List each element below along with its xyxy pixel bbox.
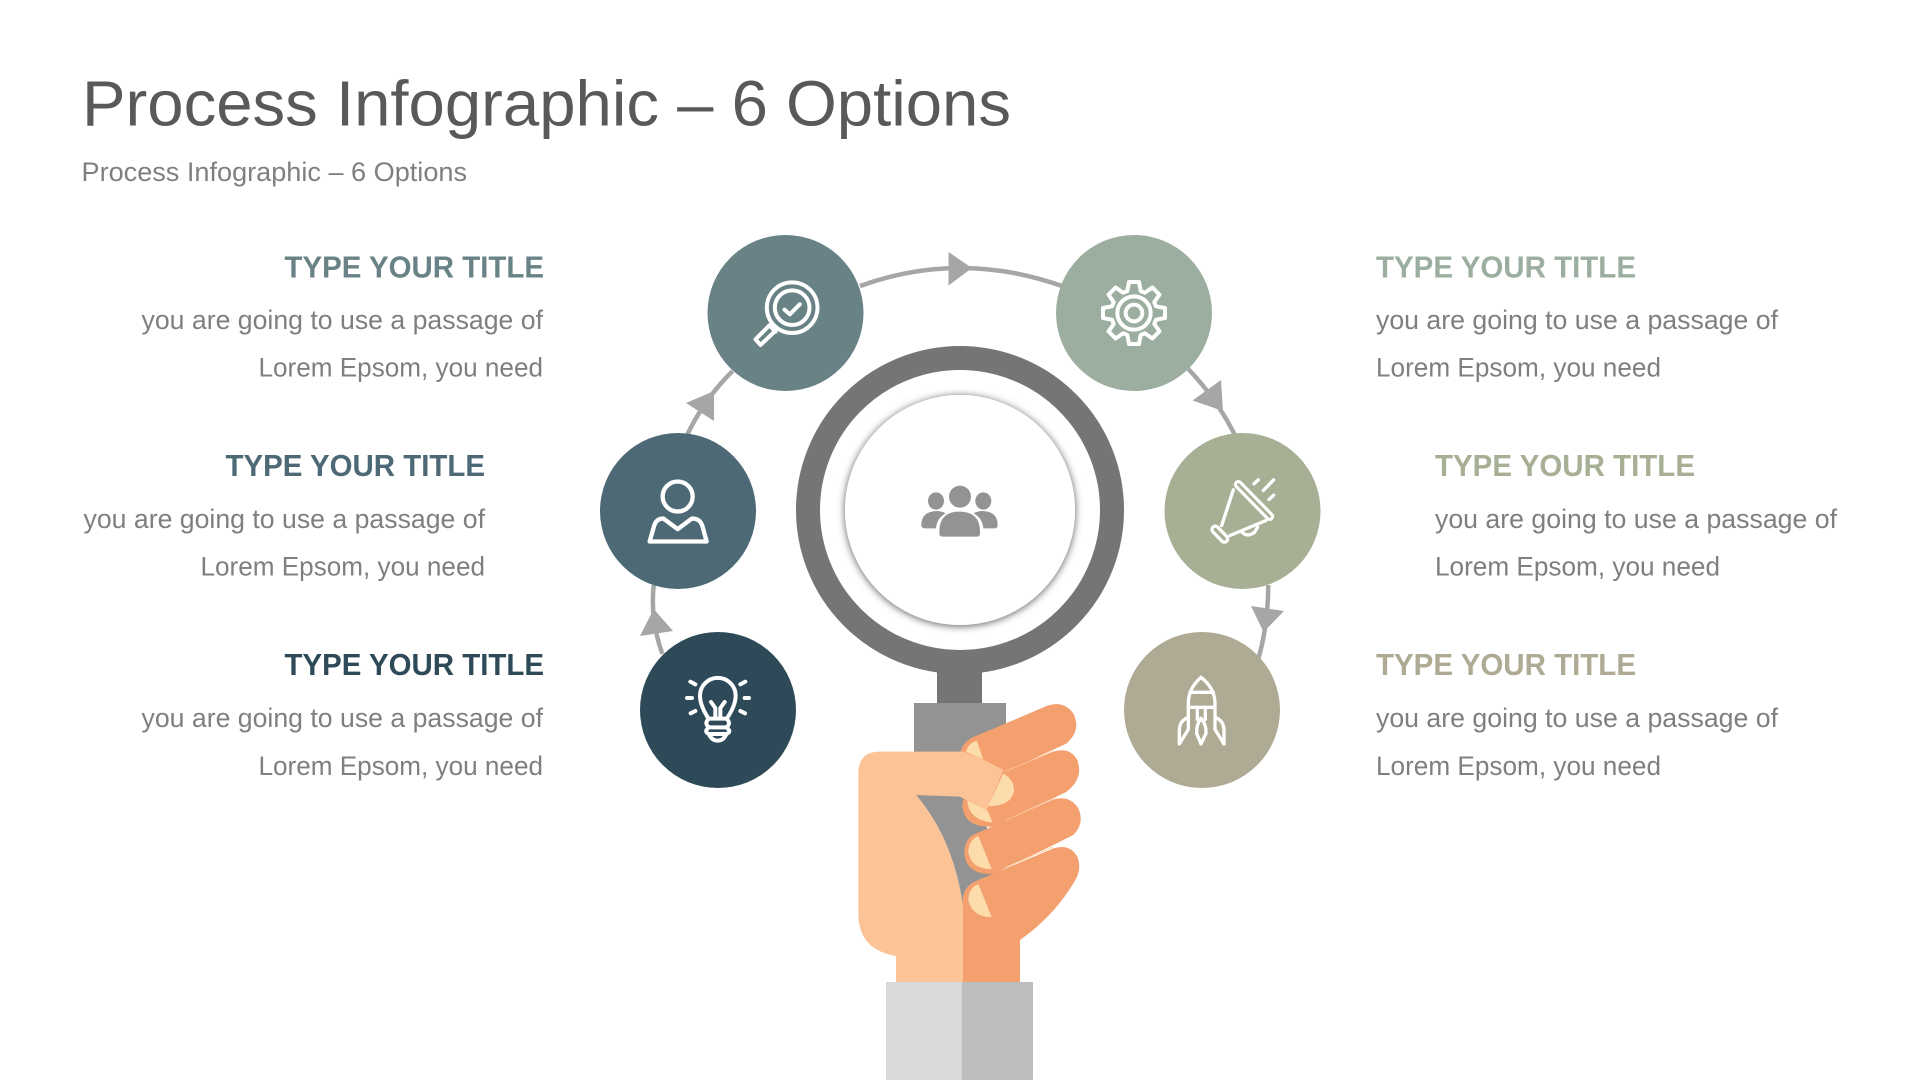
icon: magnifier with check	[755, 282, 817, 345]
text block: person step	[84, 448, 485, 582]
arrow: search to settings	[860, 252, 1062, 286]
step circle: person	[600, 433, 756, 589]
body: search step: Lorem Epsom, you need	[258, 352, 543, 382]
body: search step: you are going to use a passage of	[142, 305, 543, 335]
fingernails	[966, 741, 993, 917]
thumbnail	[987, 770, 1019, 811]
heading: person step: TYPE YOUR TITLE	[226, 448, 485, 483]
text block: rocket step	[1376, 647, 1778, 781]
fingers	[961, 704, 1081, 982]
icon: person	[650, 481, 707, 541]
body: settings step: you are going to use a passage of	[1376, 305, 1778, 335]
body: settings step	[1376, 305, 1778, 382]
magnifying glass	[808, 358, 1112, 763]
heading: idea step: TYPE YOUR TITLE	[284, 647, 544, 682]
body: megaphone step	[1435, 504, 1837, 582]
step circle: idea	[640, 632, 796, 788]
body: person step: you are going to use a passage of	[84, 504, 485, 534]
body: idea step: Lorem Epsom, you need	[258, 751, 543, 781]
body: rocket step	[1376, 703, 1778, 781]
arrow: settings to megaphone	[1188, 369, 1234, 434]
step circle: settings	[1056, 235, 1212, 391]
body: settings step: Lorem Epsom, you need	[1376, 352, 1661, 382]
hand holding the magnifier	[858, 704, 1081, 1080]
heading: settings step: TYPE YOUR TITLE	[1376, 250, 1636, 284]
arrow: person to search	[686, 371, 733, 434]
subtitle: Process Infographic – 6 Options	[82, 157, 467, 187]
icon: gear	[1103, 282, 1165, 344]
magnifier handle neck	[937, 668, 982, 708]
icon: rocket	[1179, 677, 1224, 744]
grip visible through fingers	[916, 795, 1003, 907]
arrow: megaphone to rocket	[1251, 585, 1284, 658]
arrow: idea to person	[640, 585, 673, 654]
icon: light bulb	[687, 678, 749, 741]
palm and thumb	[858, 752, 1007, 982]
body: rocket step: Lorem Epsom, you need	[1376, 751, 1661, 781]
heading: rocket step: TYPE YOUR TITLE	[1376, 647, 1636, 682]
heading: search step: TYPE YOUR TITLE	[284, 250, 544, 284]
magnifier ring	[808, 358, 1112, 662]
body: idea step: you are going to use a passage of	[142, 703, 543, 733]
sleeve	[886, 982, 1033, 1080]
step circle: rocket	[1124, 632, 1280, 788]
magnifier lens	[845, 395, 1075, 625]
text block: search step	[142, 250, 544, 382]
body: idea step	[142, 703, 543, 781]
finger separators	[1005, 751, 1053, 868]
magnifier grip	[914, 703, 1006, 763]
text block: idea step	[142, 647, 544, 781]
text block: megaphone step	[1435, 448, 1837, 582]
body: search step	[142, 305, 543, 382]
icon: megaphone	[1215, 480, 1274, 539]
heading: megaphone step: TYPE YOUR TITLE	[1435, 448, 1695, 483]
body: rocket step: you are going to use a passage of	[1376, 703, 1778, 733]
step circle: search	[708, 235, 864, 391]
body: person step: Lorem Epsom, you need	[200, 552, 485, 582]
body: person step	[84, 504, 485, 582]
title: Process Infographic – 6 Options	[82, 68, 1011, 140]
body: megaphone step: Lorem Epsom, you need	[1435, 552, 1720, 582]
icon: people group	[921, 486, 998, 537]
step circle: megaphone	[1164, 433, 1320, 589]
text block: settings step	[1376, 250, 1778, 382]
body: megaphone step: you are going to use a passage of	[1435, 504, 1837, 534]
